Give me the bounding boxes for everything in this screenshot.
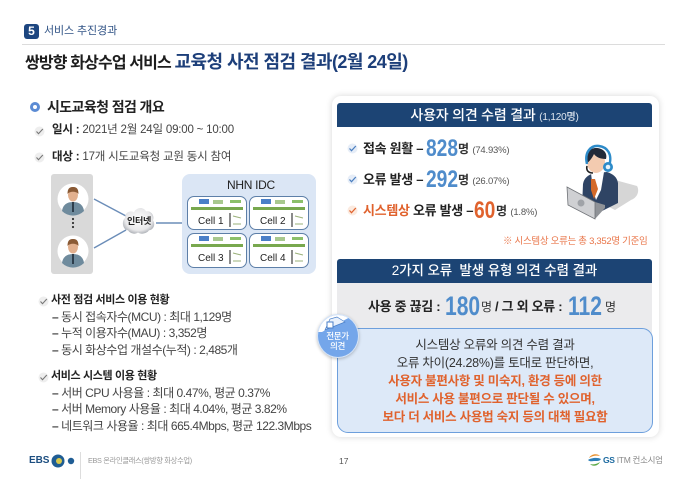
icon: check blue	[348, 174, 358, 184]
icon: doctor	[318, 315, 348, 332]
icon: section bullet	[30, 102, 40, 112]
unit and share: 명 (26.07%)	[458, 173, 509, 187]
EBS wordmark: EBS	[29, 455, 49, 466]
panel: expert opinion	[337, 328, 653, 433]
list item: – 동시 화상수업 개설수(누적) : 2,485개	[52, 343, 238, 357]
pre-check usage list	[38, 294, 238, 357]
icon: check target	[34, 152, 44, 162]
header: survey results	[337, 103, 652, 127]
unit and share: 명 (74.93%)	[458, 142, 509, 156]
header: survey results: 사용자 의견 수렴 결과 (1,120명)	[410, 107, 579, 123]
badge label: 의견	[330, 341, 345, 351]
list item: – 동시 접속자수(MCU) : 최대 1,129명	[52, 310, 232, 324]
expert opinion text: 서비스 사용 불편으로 판단될 수 있으며,	[395, 392, 595, 406]
footer logo: EBS	[29, 454, 74, 468]
badge: expert opinion	[317, 314, 359, 358]
system usage list	[38, 370, 312, 433]
cell 4: Cell 4	[260, 253, 286, 264]
panel: NHN IDC	[182, 174, 316, 274]
icon: headset agent	[566, 144, 638, 220]
section badge: 5	[28, 24, 35, 38]
expert opinion text: 시스템상 오류와 의견 수렴 결과	[415, 338, 575, 352]
section label: 서비스 추진경과	[44, 25, 117, 37]
title: 쌍방향 화상수업 서비스 교육청 사전 점검 결과(2월 24일)	[25, 52, 408, 72]
footnote: ※ 시스템상 오류는 총 3,352명 기준임	[503, 236, 647, 247]
stat: smooth access	[363, 135, 509, 162]
cell 3: Cell 3	[198, 253, 224, 264]
connection lines	[94, 198, 182, 249]
value 828: 828	[426, 135, 458, 162]
expert opinion text	[382, 338, 608, 424]
users panel	[51, 174, 93, 274]
badge label	[326, 331, 349, 351]
list item: – 서버 CPU 사용율 : 최대 0.47%, 평균 0.37%	[52, 386, 270, 400]
section badge	[24, 24, 39, 39]
unit and share: 명 (1.8%)	[496, 204, 537, 218]
page number: 17	[339, 456, 348, 466]
date line: 일시 : 2021년 2월 24일 09:00 ~ 10:00	[52, 124, 234, 136]
expert opinion text: 오류 차이(24.28%)를 토대로 판단하면,	[397, 356, 593, 370]
icon: check orange	[348, 206, 358, 216]
value 60: 60	[474, 197, 495, 224]
overview heading: 시도교육청 점검 개요	[47, 99, 164, 115]
cell 2: Cell 2	[260, 216, 286, 227]
list item: – 서버 Memory 사용율 : 최대 4.04%, 평균 3.82%	[52, 402, 287, 416]
expert opinion text: 사용자 불편사항 및 미숙지, 환경 등에 의한	[388, 374, 602, 388]
value 180: 180	[445, 291, 480, 321]
list heading: 사전 점검 서비스 이용 현황	[51, 294, 169, 306]
second label: / 그 외 오류 :	[495, 299, 562, 314]
cell 4	[249, 233, 309, 268]
label: 오류 발생 –	[363, 172, 423, 187]
footer caption: EBS 온라인클래스(쌍방향 화상수업)	[88, 456, 192, 465]
internet label: 인터넷	[127, 216, 151, 226]
list item: – 누적 이용자수(MAU) : 3,352명	[52, 326, 207, 340]
panel: survey results	[332, 96, 659, 437]
header: error types: 2가지 오류 발생 유형 의견 수렴 결과	[392, 263, 597, 278]
footer logo: GS ITM	[588, 454, 663, 466]
panel: error type counts	[337, 283, 652, 343]
cell 2	[249, 196, 309, 230]
heading: NHN IDC: NHN IDC	[227, 178, 275, 192]
label: 접속 원활 –	[363, 141, 423, 156]
header: error types	[337, 259, 652, 283]
network diagram	[51, 174, 316, 274]
wordmark: GS ITM 컨소시엄	[603, 455, 663, 465]
badge label: 전문가	[326, 331, 349, 341]
cell 1: Cell 1	[198, 216, 224, 227]
list item: – 네트워크 사용율 : 최대 665.4Mbps, 평균 122.3Mbps	[52, 419, 311, 433]
label: 시스템상 오류 발생 –	[363, 203, 473, 218]
cell 3	[187, 233, 247, 268]
stat: errors	[363, 166, 509, 193]
stat: system errors	[363, 197, 537, 224]
logo mark	[588, 454, 601, 466]
list heading: 서비스 시스템 이용 현황	[51, 370, 157, 382]
unit: 명	[481, 300, 492, 314]
icon: check	[38, 296, 48, 306]
target line: 대상 : 17개 시도교육청 교원 동시 참여	[52, 151, 231, 163]
cell 1	[187, 196, 247, 230]
icon: check blue	[348, 144, 358, 154]
value 112: 112	[568, 291, 602, 321]
unit: 명	[605, 300, 616, 314]
icon: check date	[34, 126, 44, 136]
cloud: internet	[122, 208, 154, 234]
expert opinion text: 보다 더 서비스 사용법 숙지 등의 대책 필요함	[382, 410, 608, 424]
label: 사용 중 끊김 :	[368, 299, 440, 314]
icon: check	[38, 372, 48, 382]
logo mark	[52, 454, 74, 468]
value 292: 292	[426, 166, 458, 193]
